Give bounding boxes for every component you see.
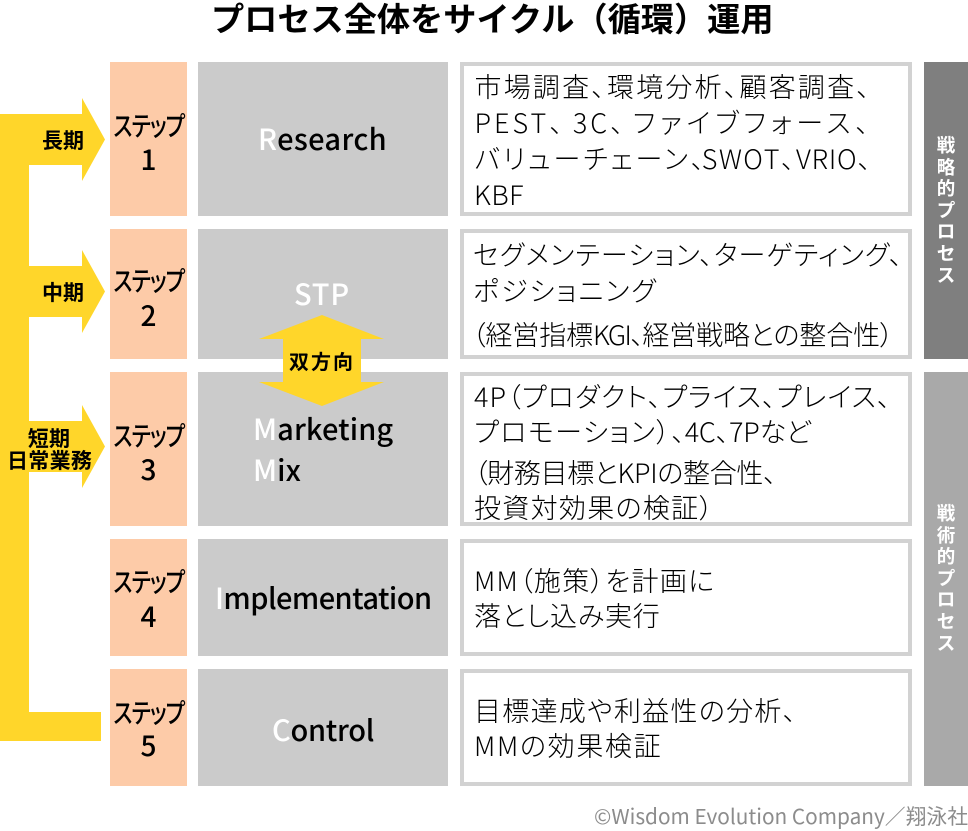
text box: step 4: 落とし込み実行 [474, 595, 661, 634]
panel: STP: STP [294, 272, 350, 314]
text box: step 3: （財務目標とKPIの整合性、 [474, 452, 776, 491]
text box: step 1 [460, 62, 912, 216]
step 3: ステップ [113, 415, 184, 454]
side band: strategic process: ロ [937, 218, 955, 244]
side band: strategic process [924, 62, 968, 359]
text box: step 2: セグメンテーション、ターゲティング、 [473, 234, 903, 273]
step 4: ステップ [113, 561, 184, 600]
side band: strategic process: プ [937, 197, 955, 223]
panel: Implementation: Implementation [215, 576, 432, 618]
text box: step 3: 投資対効果の検証） [474, 487, 714, 526]
step 2: ステップ [113, 260, 184, 299]
text box: step 5 [460, 669, 912, 786]
label: short term and daily work: 日常業務 [7, 445, 92, 475]
step 1: 1 [141, 139, 156, 179]
text box: step 2 [460, 229, 912, 359]
side band: tactical process: セ [937, 608, 955, 634]
text box: step 4: MM（施策）を計画に [474, 560, 715, 599]
step 5 [110, 669, 187, 786]
side band: tactical process: 戦 [937, 500, 955, 526]
label: short term and daily work [7, 423, 92, 475]
text box: step 2: （経営指標KGI、経営戦略との整合性） [472, 314, 893, 353]
label: long term: 長期 [42, 125, 84, 155]
panel: STP [198, 229, 448, 359]
step 5: 5 [141, 725, 156, 765]
side band: tactical process [924, 372, 968, 786]
text box: step 5: MMの効果検証 [474, 725, 662, 764]
step 2 [110, 229, 187, 359]
text box: step 1: KBF [474, 174, 524, 213]
panel: Research: Research [258, 117, 387, 159]
side band: strategic process: 略 [937, 154, 955, 180]
step 1: ステップ [113, 105, 184, 144]
step 4 [110, 539, 187, 656]
text box: step 1: バリューチェーン、SWOT、VRIO、 [474, 138, 872, 177]
side band: strategic process: セ [937, 240, 955, 266]
side band: tactical process: 術 [937, 522, 955, 548]
side band: tactical process: ロ [937, 586, 955, 612]
yellow timeline arrows [0, 98, 105, 741]
side band: strategic process: 戦 [937, 132, 955, 158]
side band: strategic process: ス [937, 262, 955, 288]
side band: tactical process: プ [937, 565, 955, 591]
side band: tactical process: ス [937, 630, 955, 656]
text box: step 3: プロモーション）、4C、7Pなど [474, 411, 811, 450]
step 4: 4 [141, 596, 156, 636]
side band: tactical process: 的 [937, 543, 955, 569]
step 3 [110, 372, 187, 526]
step 3: 3 [141, 449, 156, 489]
text box: step 4 [460, 539, 912, 656]
text box: step 3 [460, 372, 912, 526]
text box: step 1: PEST、3C、ファイブフォース、 [474, 102, 874, 141]
panel: Implementation [198, 539, 448, 656]
step 1 [110, 62, 187, 216]
text box: step 5: 目標達成や利益性の分析、 [474, 690, 797, 729]
text box: step 3: 4P（プロダクト、プライス、プレイス、 [474, 376, 892, 415]
side band: strategic process: 的 [937, 175, 955, 201]
panel: Control [198, 669, 448, 786]
step 2: 2 [141, 295, 156, 335]
label: short term and daily work: 短期 [28, 423, 70, 453]
text box: step 1: 市場調査、環境分析、顧客調査、 [474, 66, 872, 105]
label: bidirectional: 双方向 [289, 346, 355, 375]
panel: Research [198, 62, 448, 216]
panel: Control: Control [272, 708, 374, 750]
label: mid term: 中期 [42, 277, 84, 307]
panel: Marketing Mix: Mix [253, 448, 301, 490]
double-headed arrow [259, 315, 384, 406]
panel: Marketing Mix: Marketing [253, 407, 393, 449]
text box: step 2: ポジショニング [473, 270, 658, 309]
panel: Marketing Mix [198, 372, 448, 526]
copyright: ©Wisdom Evolution Company／翔泳社 [594, 800, 968, 830]
step 5: ステップ [113, 692, 184, 731]
